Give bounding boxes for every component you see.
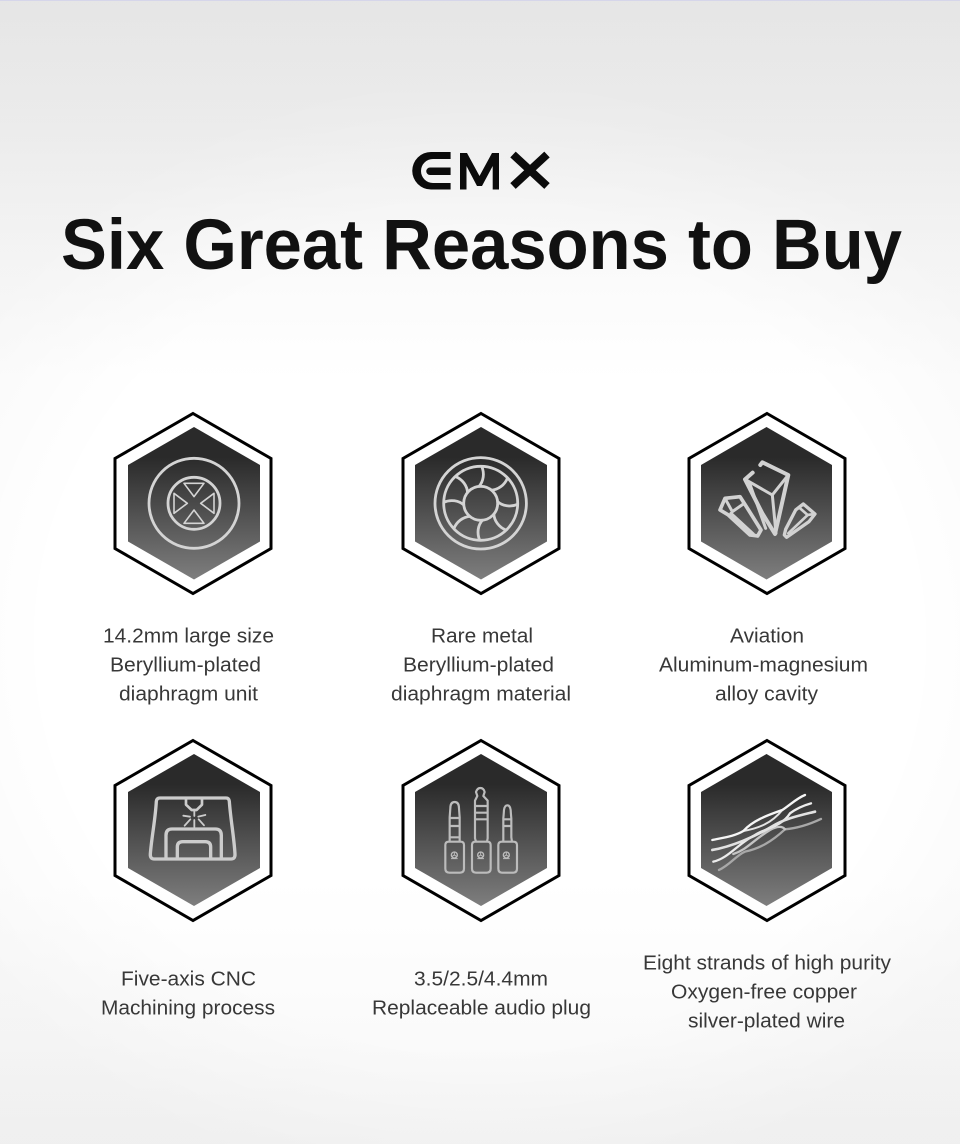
caption: silver-plated wire [643, 952, 891, 1032]
caption: diaphragm material: Beryllium-plated [403, 654, 554, 676]
caption: large diaphragm unit: diaphragm unit [119, 684, 258, 706]
logo: EMX [412, 152, 547, 190]
caption: diaphragm material [391, 626, 571, 706]
caption: alloy cavity: alloy cavity [715, 684, 818, 706]
caption: alloy cavity: Aviation [730, 626, 804, 648]
badge: alloy cavity crystals icon [689, 414, 845, 594]
badge: diaphragm material icon [403, 414, 559, 594]
title: Six Great Reasons to Buy [61, 206, 902, 285]
caption: silver-plated wire: Eight strands of high purity [643, 952, 891, 974]
caption: alloy cavity: Aluminum-magnesium [659, 654, 868, 676]
caption: CNC machining: Machining process [101, 998, 275, 1020]
badge: CNC machining icon [115, 740, 271, 920]
caption: audio plug [372, 968, 591, 1020]
caption: audio plug: Replaceable audio plug [372, 998, 591, 1020]
badge: silver-plated wire strands icon [689, 740, 845, 920]
badge: large diaphragm unit icon [115, 414, 271, 594]
caption: diaphragm material: diaphragm material [391, 684, 571, 706]
caption: diaphragm material: Rare metal [431, 626, 533, 648]
caption: large diaphragm unit: 14.2mm large size [103, 626, 274, 648]
caption: CNC machining [101, 968, 275, 1020]
caption: large diaphragm unit: Beryllium-plated [110, 654, 261, 676]
caption: audio plug: 3.5/2.5/4.4mm [414, 968, 548, 990]
caption: large diaphragm unit [103, 626, 274, 706]
caption: silver-plated wire: silver-plated wire [688, 1010, 845, 1032]
badge: replaceable audio plugs icon [403, 740, 559, 920]
caption: alloy cavity [659, 626, 868, 706]
caption: silver-plated wire: Oxygen-free copper [671, 982, 857, 1004]
caption: CNC machining: Five-axis CNC [121, 968, 256, 990]
